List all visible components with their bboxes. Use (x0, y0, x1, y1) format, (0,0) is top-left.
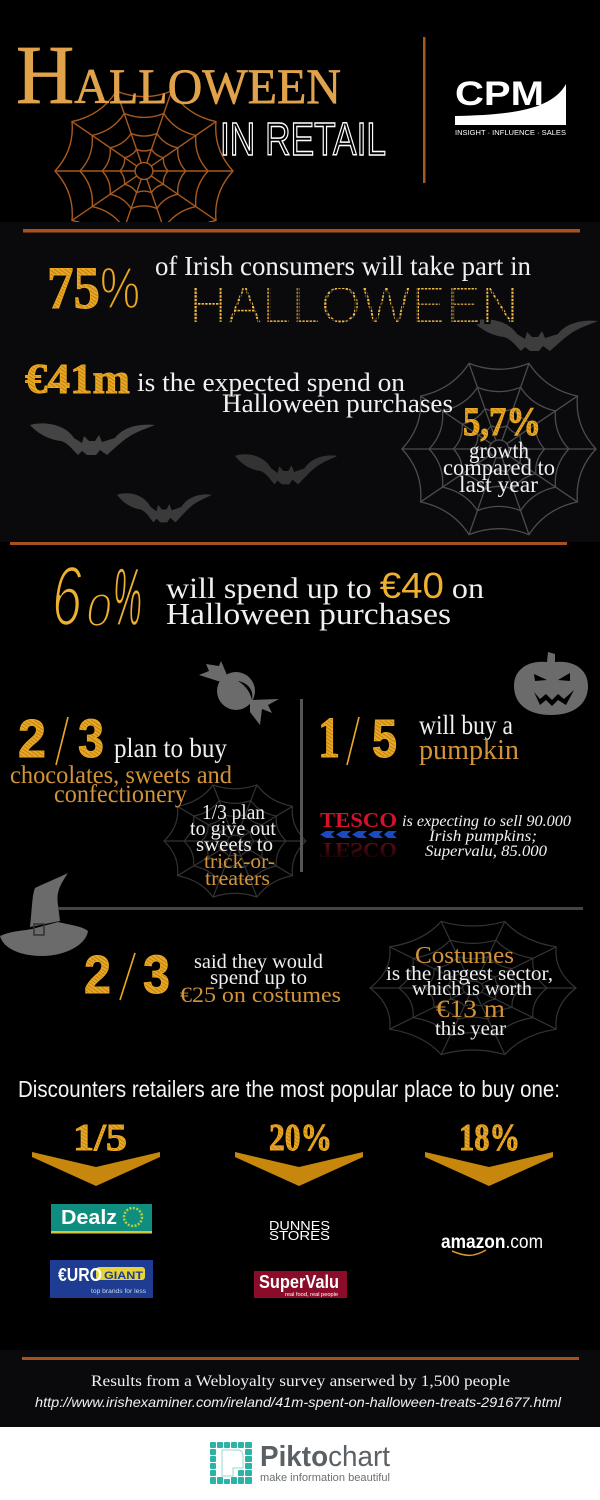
stat: 75 percent: 75 (47, 255, 100, 321)
logo: Eurogiant: top brands for less (91, 1289, 146, 1295)
subtitle: in retail: IN RETAIL (220, 113, 386, 165)
text: of Irish consumers: of Irish consumers will take part in (155, 251, 531, 281)
panel: discount retailers (18, 1076, 560, 1298)
logo: Eurogiant (50, 1260, 153, 1298)
web: sweets web (164, 785, 306, 897)
text: growth compared to last year: growth (469, 438, 529, 463)
text: Tesco expecting: Irish pumpkins; (428, 828, 537, 845)
text: growth compared to last year: compared to (443, 455, 555, 480)
logo: Dealz: Dealz (61, 1207, 117, 1229)
text: pumpkin: pumpkin (419, 735, 519, 766)
logo: Dunnes Stores: DUNNES (269, 1218, 330, 1233)
text: expected spend: is the expected spend on (137, 368, 405, 397)
text: growth compared to last year (443, 438, 555, 497)
text: growth compared to last year: last year (459, 472, 538, 497)
stat: two thirds (18, 709, 104, 769)
logo: CPM: CPM (455, 75, 544, 113)
stat: two thirds costumes: 3 (143, 945, 170, 1005)
logo: Tesco (320, 808, 397, 862)
text: one third give out sweets: trick-or- (204, 849, 275, 873)
text: said they would spend: €25 on costumes (180, 982, 341, 1007)
stat: two thirds costumes: 2 (84, 945, 111, 1005)
icon: Piktochart mark (210, 1442, 252, 1484)
stat: two thirds costumes (84, 945, 170, 1005)
text: costumes largest sector: this year (435, 1018, 506, 1040)
stat: one fifth: 1 (318, 705, 340, 770)
logo: Dealz (51, 1204, 152, 1234)
arrow: middle chevron (235, 1152, 363, 1186)
panel: costumes (84, 921, 576, 1055)
stat: two thirds: 2 (18, 709, 46, 769)
logo: SuperValu: real food, real people (285, 1292, 338, 1298)
text: source url: http://www.irishexaminer.com/ireland/41m-spent-on-halloween-treats-291677.html (35, 1394, 562, 1410)
text: one third give out sweets: treaters (205, 866, 270, 890)
text: said they would spend: spend up to (210, 967, 307, 989)
title: Halloween: HALLOWEEN (16, 29, 341, 122)
logo text: Piktochart: Piktochart (260, 1441, 390, 1473)
text: costumes largest sector: €13 m (436, 996, 506, 1023)
text: Tesco expecting: Supervalu, 85.000 (425, 843, 547, 860)
stat: 60 percent: 0 (86, 584, 111, 636)
stat: 75 percent (47, 255, 140, 321)
icon: orange spider web (54, 91, 234, 222)
text: one third give out sweets (190, 800, 276, 890)
panel: Piktochart branding (0, 1427, 600, 1500)
bat: middle (235, 454, 338, 484)
stat: two thirds: 3 (78, 709, 104, 769)
panel: header (18, 37, 566, 222)
logo: Eurogiant: €URO (58, 1265, 102, 1285)
rule: section top (23, 229, 580, 232)
rule: footer (22, 1357, 579, 1360)
panel: key statistics band (0, 222, 600, 542)
panel: pumpkins (318, 652, 588, 862)
text: survey source: Results from a Webloyalty survey anserwed by 1,500 people (91, 1373, 510, 1390)
panel: source footer (0, 1350, 600, 1427)
text: costumes largest sector: which is worth (412, 978, 532, 1000)
text: said they would spend: said they would (194, 951, 323, 973)
stat: one fifth: 5 (372, 709, 397, 769)
text: one third give out sweets: sweets to (196, 832, 273, 856)
icon: pumpkin (514, 652, 588, 715)
web: grey growth web (402, 363, 596, 535)
text: said they would spend (180, 951, 341, 1007)
text: chocolates sweets: chocolates, sweets and (10, 762, 232, 789)
stat: one fifth (318, 705, 397, 770)
logo: CPM: INSIGHT · INFLUENCE · SALES (455, 128, 566, 137)
logo: Dunnes Stores (269, 1218, 330, 1243)
stat: 18 percent: 18% (459, 1117, 520, 1159)
text: costumes largest sector (386, 943, 553, 1040)
text: will buy a: will buy a (419, 710, 513, 740)
stat: 60 percent: 6 (52, 549, 82, 643)
text: dotted Halloween: HALLOWEEN (189, 276, 519, 335)
logo: Eurogiant: GIANT (104, 1270, 143, 1282)
text: costumes largest sector: is the largest sector, (386, 963, 553, 985)
panel: spending 60 percent (52, 549, 484, 643)
text: plan to buy: plan to buy (114, 733, 227, 763)
text: one third give out sweets: to give out (190, 816, 276, 840)
text: make information beautiful: make information beautiful (260, 1472, 390, 1484)
text: one third give out sweets: 1/3 plan (202, 800, 265, 824)
text: Halloween purchases: Halloween purchases (166, 596, 451, 631)
stat: one fifth retailers: 1/5 (73, 1117, 127, 1159)
bat: left (30, 423, 155, 455)
text: Halloween purchases: Halloween purchases (222, 389, 453, 418)
rule: section two (10, 542, 567, 545)
text: costumes largest sector: Costumes (415, 943, 514, 969)
stat: 60 percent (52, 549, 142, 643)
logo: Amazon: amazon.com (441, 1232, 543, 1253)
stat: 75 percent: % (100, 256, 140, 321)
logo: Tesco: TESCO (320, 838, 397, 862)
stat: 41 million euro: €41m (25, 357, 130, 403)
logo: CPM (455, 75, 566, 137)
stat: 20 percent: 20% (269, 1117, 332, 1159)
divider: header vertical line (423, 37, 426, 183)
bat: lower (117, 493, 212, 522)
text: confectionery: confectionery (54, 781, 187, 808)
logo: Dunnes Stores: STORES (269, 1228, 330, 1243)
arrow: right chevron (425, 1152, 553, 1186)
text: Tesco expecting: is expecting to sell 90.000 (402, 813, 571, 830)
logo: SuperValu: SuperValu (259, 1272, 339, 1292)
panel: spending 60 percent: % (113, 552, 142, 643)
divider: vertical grey (300, 699, 303, 872)
text: Tesco expecting (402, 813, 571, 860)
text: will spend up to 40 euro: will spend up to €40 on (166, 565, 484, 606)
icon: witch hat (0, 873, 88, 956)
stat: 5,7 percent: 5,7% (463, 399, 541, 444)
bat: top right (473, 319, 598, 351)
icon: candy (199, 661, 279, 725)
panel: sweets (10, 661, 306, 897)
web: costumes web (370, 921, 576, 1055)
logo: Tesco: TESCO (320, 808, 397, 832)
divider: horizontal grey (58, 907, 583, 910)
arrow: left chevron (32, 1152, 160, 1186)
